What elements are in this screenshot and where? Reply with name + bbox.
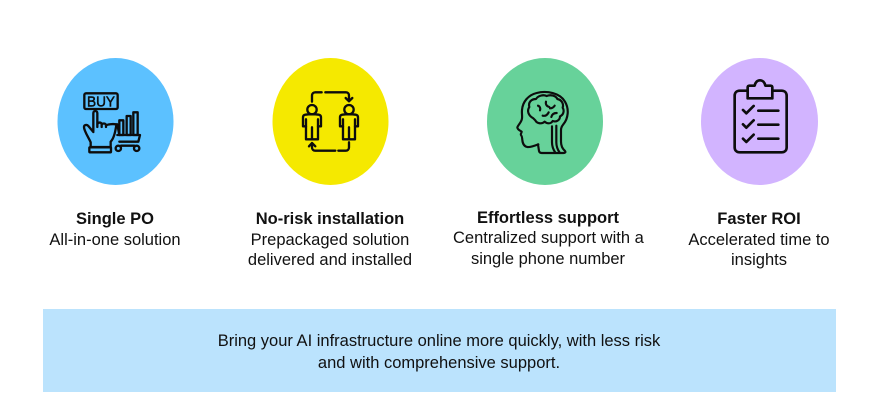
text: faster ROI: Faster ROI <box>717 210 801 228</box>
text: effortless support: single phone number <box>471 250 625 268</box>
text: single PO <box>49 210 181 248</box>
icon: two people swapping <box>272 58 388 185</box>
text: single PO: All-in-one solution <box>49 230 181 248</box>
text: no-risk installation: Prepackaged solution <box>251 230 409 248</box>
banner: summary statement: and with comprehensive support. <box>318 354 560 372</box>
icon: buy button and shopping cart: BUY <box>87 94 115 110</box>
text: no-risk installation <box>248 210 412 269</box>
icon: head with brain <box>487 58 603 185</box>
text: faster ROI: insights <box>731 251 787 269</box>
icon: clipboard checklist <box>701 58 818 185</box>
text: effortless support: Effortless support <box>477 208 619 226</box>
text: effortless support <box>453 208 644 268</box>
text: faster ROI: Accelerated time to <box>688 230 830 248</box>
text: faster ROI <box>688 210 830 269</box>
banner: summary statement: Bring your AI infrastructure online more quickly, with less risk <box>218 332 660 350</box>
text: no-risk installation: No-risk installation <box>256 210 404 228</box>
text: no-risk installation: delivered and installed <box>248 251 412 269</box>
text: single PO: Single PO <box>76 210 154 228</box>
banner: summary statement <box>43 309 836 392</box>
text: effortless support: Centralized support with a <box>453 229 644 247</box>
icon: buy button and shopping cart <box>58 58 174 185</box>
